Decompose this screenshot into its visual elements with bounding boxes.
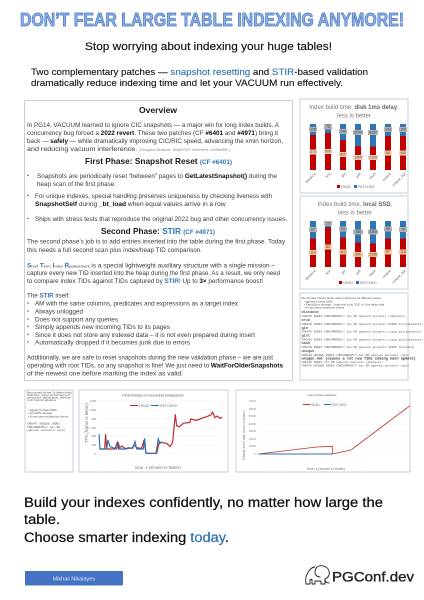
notes text: • 8 concurrent pgbench clients	[28, 414, 69, 418]
text: overview paragraph	[27, 122, 283, 153]
bar chart: 63	[341, 227, 345, 231]
panel: TPS line chart: time, s (shorter is better)	[135, 465, 181, 470]
line: PATCHED	[258, 452, 332, 455]
benchmark index commands: CREATE INDEX CONCURRENTLY idx ON pgbench_accounts using gin(abalance)	[302, 330, 421, 334]
bar chart: 1350	[354, 156, 362, 160]
panel: chart disk 1ms delay	[300, 99, 408, 193]
summary text: Two complementary patches — snapshot resetting and STIR-based validation	[31, 67, 368, 78]
axis titles: TPS (higher is better)	[84, 403, 89, 443]
grid and axis labels: 20000	[249, 437, 257, 441]
category labels: distance	[304, 269, 317, 281]
benchmark index commands: distance	[302, 310, 319, 315]
bar chart: 306	[355, 252, 361, 256]
text: additional note	[27, 354, 283, 378]
closing statement: table.	[24, 512, 60, 527]
list: stir properties: Always unlogged	[35, 308, 83, 316]
panel: chart local SSD	[300, 196, 408, 289]
category labels: unique	[381, 269, 392, 279]
grid and axis labels: 800	[91, 417, 96, 421]
grid and axis labels: 50000	[249, 414, 257, 418]
icon: elephant	[306, 566, 329, 584]
heading: overview: Overview	[139, 106, 178, 115]
list: first phase bullets: Snapshots are periodically reset “between” pages to GetLatestSnapshot() during the	[37, 173, 277, 180]
benchmark intro: Benchmark shows faster index build time for different cases:	[302, 296, 382, 300]
text: overview paragraph: concurrency bug forced a 2022 revert. These two patches (CF #6401 and #4971) bring it	[27, 130, 278, 137]
bar chart: 133	[385, 128, 391, 132]
list: stir properties: Automatically dropped if it becomes junk due to errors	[35, 340, 191, 346]
grid and axis labels: 0	[255, 452, 257, 456]
panel: xmin horizon line chart: time, s (shorter is better)	[307, 467, 345, 471]
text: additional note: operating with root TIDs, so any snapshot is fine! We just need to WaitForOlderSnapshots	[27, 362, 283, 370]
grid and axis labels: 1200	[90, 399, 96, 403]
legend	[303, 403, 347, 407]
list: stir properties: Since it does not store any indexed data – it is not even prepared during insert	[35, 332, 255, 339]
category labels: gist	[355, 269, 362, 276]
text: second phase: The STIR itself:	[27, 292, 70, 300]
closing statement: Choose smarter indexing today.	[24, 530, 229, 545]
bar chart	[304, 124, 407, 187]
notes command	[27, 422, 65, 432]
grid and axis labels: 200	[91, 443, 96, 447]
summary text: dramatically reduce indexing time and let your VACUUM run effectively.	[31, 78, 343, 89]
benchmark index commands: gin	[302, 326, 308, 331]
category labels: unique	[381, 172, 392, 182]
category labels: brin	[325, 172, 332, 179]
text: overview paragraph: and reducing vacuum interference. (Original feature: d9d0762; reverted: e28bb88.)	[27, 146, 231, 153]
bar chart: 246	[340, 130, 346, 134]
grid and axis labels	[249, 399, 410, 456]
list: first phase bullets: For unique indexes, special handling preserves uniqueness by checking liveness with	[35, 193, 272, 200]
closing statement	[24, 495, 383, 545]
list: first phase bullets: SnapshotSelf during _bt_load when equal values arrive in a row.	[35, 201, 227, 208]
heading: second phase: Second Phase: STIR (CF #4971)	[101, 226, 215, 236]
benchmark index commands: CREATE INDEX hot ON pgbench_accounts (abalance)	[302, 360, 383, 364]
legend: PATCHED	[360, 281, 377, 285]
text: overview paragraph: In PG14, VACUUM learned to ignore CIC snapshots — a major win for long index builds. A	[27, 122, 280, 129]
bar chart: 358	[355, 230, 361, 234]
legend: HEAD	[139, 404, 150, 408]
wordmark: PGConf.dev	[332, 570, 414, 584]
chart title: xmin horizon advance	[307, 393, 337, 397]
bar chart: 800	[340, 152, 346, 156]
bar chart: 112	[340, 250, 346, 254]
benchmark index commands: CREATE INDEX CONCURRENTLY idx ON pgbench_accounts USING hash(bid)	[302, 345, 415, 349]
author badge: Mikhail Nikalayeu	[53, 576, 95, 582]
bar chart	[304, 221, 407, 284]
bar chart: 67	[311, 228, 315, 232]
panel: chart local SSD: less is better	[338, 210, 372, 216]
grid and axis labels: 10000	[249, 444, 257, 448]
list: first phase bullets: Ships with stress tests that reproduce the original 2022 bug and other concurrency issues.	[35, 216, 287, 223]
grid and axis labels: 400	[91, 434, 96, 438]
benchmark intro: • pgbench scale 5000	[304, 300, 333, 304]
list: stir properties: Simply appends new incoming TIDs to its pages	[35, 324, 171, 331]
text: second phase: capture every new TID inserted into the heap during the first phase. As a result, we only need	[27, 270, 280, 277]
bar chart: 2156	[369, 252, 377, 256]
line: HEAD	[99, 412, 222, 453]
text: second phase: Short Term Index Replacement is a special lightweight auxiliary structure with a single mission –	[27, 262, 275, 270]
category labels	[304, 172, 407, 187]
category labels: unique_hot	[391, 269, 407, 284]
bar chart: 2120	[369, 156, 377, 160]
notes text: • pgbench scale 5000	[28, 408, 57, 412]
notes text: xmin horizon advance	[27, 398, 57, 402]
chart title: Index build time, disk 1ms delay,	[309, 105, 399, 111]
panel: xmin horizon line chart	[236, 390, 410, 472]
list: first phase bullets: heap scan of the first phase.	[37, 181, 116, 188]
legend: HEAD	[343, 281, 353, 285]
bar chart: 509	[325, 150, 331, 154]
benchmark index commands: CREATE UNIQUE INDEX CONCURRENTLY idx ON pgbench_accounts (aid)	[302, 353, 409, 357]
text: second phase	[27, 238, 286, 300]
list: stir properties: AM with the same columns, predicates and expressions as a target index	[35, 300, 239, 308]
logo: PGConf.dev	[306, 566, 414, 584]
grid and axis labels: 40000	[249, 422, 257, 426]
list: stir properties	[27, 300, 255, 346]
line: PATCHED	[99, 434, 162, 453]
text: additional note: of the newest one before marking the index as valid.	[27, 370, 183, 378]
author badge	[25, 571, 123, 586]
axis titles: Oldest xmin age (less is better)	[242, 410, 246, 460]
panel: concurrent benchmark notes	[25, 390, 73, 472]
panel: benchmark setup	[300, 293, 423, 380]
chart title: Index build time, local SSD,	[318, 202, 393, 208]
category labels	[304, 269, 407, 284]
benchmark index commands: gist	[302, 334, 310, 338]
benchmark intro: • PatchSync storage – high-end local SSD or 1ms delay disk	[304, 302, 385, 306]
benchmark index commands	[302, 310, 423, 368]
legend	[130, 404, 178, 408]
bar chart: 78	[326, 125, 330, 129]
notes text	[27, 390, 72, 418]
grid and axis labels: 70000	[249, 399, 257, 403]
text: second phase: to compare index TIDs against TIDs captured by STIR! Up to 3× performance boost!	[27, 278, 263, 285]
panel: chart disk 1ms delay: less is better	[337, 114, 371, 120]
bar chart: 3187	[369, 130, 377, 134]
notes text: build time, same performance of	[27, 393, 70, 397]
bar chart: 80	[326, 245, 330, 249]
legend: HEAD	[310, 403, 320, 407]
grid and axis labels: 30000	[249, 429, 257, 433]
summary text	[31, 67, 368, 89]
legend: PATCHED	[332, 403, 347, 407]
benchmark index commands: brin	[302, 318, 310, 323]
category labels: hash	[368, 172, 377, 180]
panel: overview	[24, 100, 292, 380]
grid and axis labels: 600	[91, 426, 96, 430]
category labels: hash	[368, 269, 377, 277]
legend	[339, 281, 377, 285]
category labels: gist	[355, 172, 362, 179]
bar chart: 13	[326, 222, 330, 226]
notes text: • io2 AWS storage	[28, 411, 52, 415]
bar chart: 150	[400, 128, 406, 132]
bar chart: 373	[310, 150, 316, 154]
notes command: CONCURRENTLY idx ON	[27, 425, 60, 429]
benchmark index commands: hash	[302, 341, 310, 346]
benchmark intro: • 8 concurrent pgbench clients	[304, 306, 345, 310]
bar chart: 3204	[354, 130, 362, 134]
bar chart: 115	[400, 250, 406, 254]
chart title: Performance of concurrent transactions	[122, 394, 184, 398]
legend: PATCHED	[358, 185, 375, 189]
benchmark index commands: CREATE INDEX CONCURRENTLY idx ON pgbench_accounts using gist(abalance)	[302, 338, 423, 342]
category labels: brin	[325, 269, 332, 276]
notes text: Benchmark shows 2x faster index	[27, 390, 72, 394]
category labels: gin	[340, 269, 347, 275]
closing statement: Build your indexes confidently, no matter how large the	[24, 495, 383, 510]
benchmark intro	[302, 296, 385, 310]
notes text: concurrent transactions, effective	[27, 396, 71, 400]
grid and axis labels: 60000	[249, 407, 257, 411]
grid and axis labels	[90, 399, 223, 456]
line: HEAD	[258, 406, 410, 454]
list: stir properties: Does not support any queries	[35, 316, 119, 324]
text: additional note: Additionally, we are safe to reset snapshots during the new validation phase – we are just	[27, 354, 273, 362]
bar chart: 55	[386, 227, 390, 231]
bar chart: 381	[385, 151, 391, 155]
text: second phase: The second phase’s job is to add entries inserted into the table during the first phase. Today	[27, 238, 286, 246]
bar chart: 70	[401, 228, 405, 232]
panel: TPS line chart	[79, 390, 228, 472]
grid and axis labels: 0	[94, 452, 96, 456]
text: second phase: this needs a full second scan plus index/heap TID comparison.	[27, 247, 202, 254]
bar chart: 97	[386, 250, 390, 254]
benchmark index commands: CREATE INDEX CONCURRENTLY idx ON pgbench_accounts (abalance)	[302, 314, 406, 318]
legend: HEAD	[341, 185, 351, 189]
notes command: pgbench_accounts (aid)	[27, 428, 65, 432]
benchmark index commands: unique	[302, 349, 314, 354]
benchmark index commands: CREATE INDEX CONCURRENTLY idx ON pgbench_accounts USING brin(abalance)	[302, 322, 423, 326]
bar chart: 3350	[369, 230, 377, 234]
heading: first phase: First Phase: Snapshot Reset (CF #6401)	[85, 156, 232, 166]
bar chart: 128	[310, 128, 316, 132]
notes command: CREATE UNIQUE INDEX	[27, 422, 60, 426]
benchmark index commands: unique_hot (causes a lot new TIDs coming each update)	[302, 356, 416, 362]
legend	[337, 185, 375, 189]
category labels: distance	[304, 172, 317, 184]
subtitle: Stop worrying about indexing your huge tables!	[85, 41, 332, 53]
bar chart: 450	[400, 151, 406, 155]
bar chart: 110	[310, 250, 316, 254]
benchmark index commands: CREATE UNIQUE INDEX CONCURRENTLY idx ON pgbench_accounts (aid)	[302, 364, 409, 368]
category labels: unique_hot	[391, 172, 407, 187]
list: first phase bullets	[27, 173, 287, 223]
category labels: gin	[340, 172, 347, 178]
legend: PATCHED	[160, 404, 178, 408]
grid and axis labels: 1000	[90, 408, 96, 412]
text: overview paragraph: back — safely — while dramatically improving CIC/RIC speed, advancing the xmin horizon,	[27, 138, 283, 145]
